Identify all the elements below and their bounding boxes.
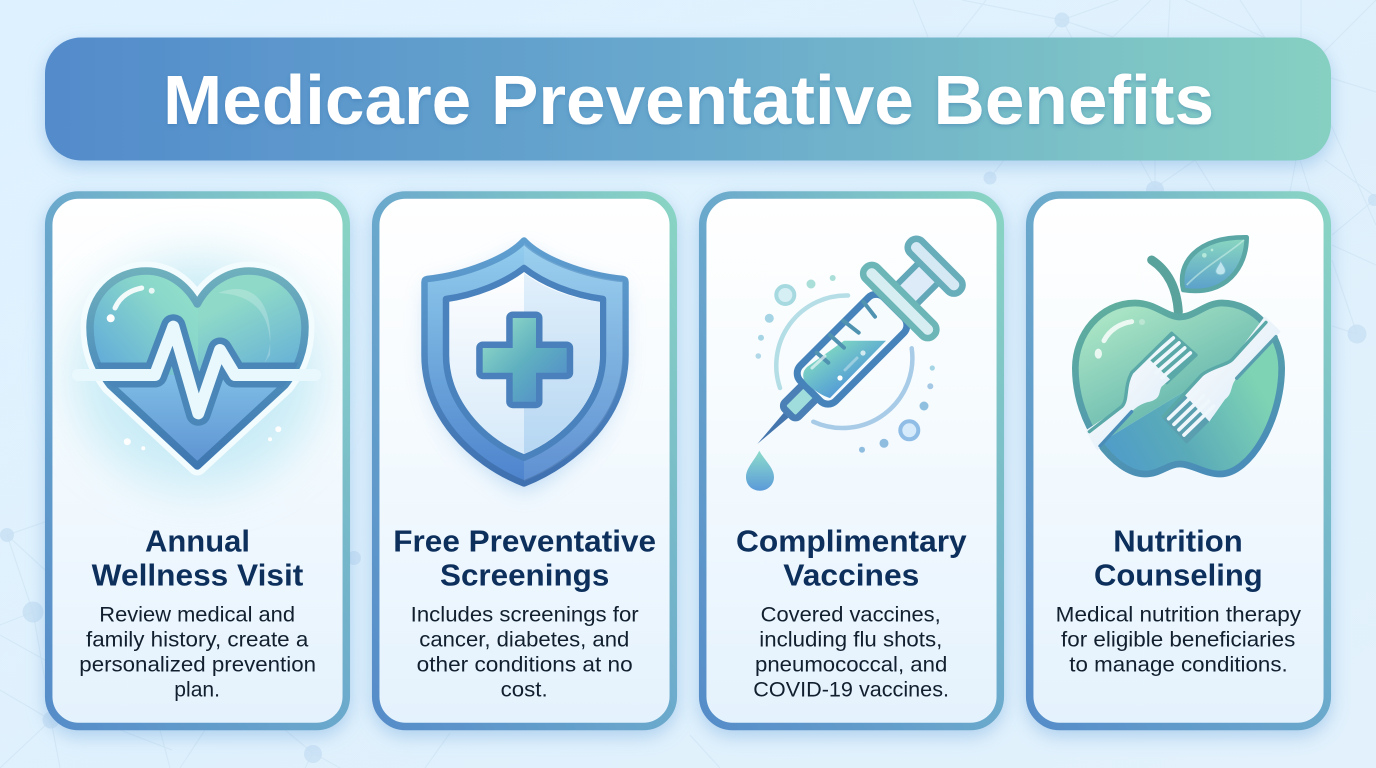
description: personalized prevention [79,654,316,677]
description: Includes screenings for [411,604,639,627]
description: Covered vaccines, [761,604,941,627]
heading: Annual [145,524,250,559]
heading: Free Preventative [393,524,656,559]
card frame [376,195,673,726]
description: other conditions at no [417,654,633,677]
icon: shield with cross [424,240,626,490]
panel: free preventative screenings [376,195,673,726]
description: pneumococcal, and [755,654,947,677]
description: cost. [501,679,548,702]
heading [736,524,967,592]
description [753,604,949,702]
description: Medical nutrition therapy [1056,604,1302,627]
panel: nutrition counseling [1030,195,1327,726]
description [79,604,316,702]
card frame [703,195,1000,726]
heading [393,524,656,592]
heading [92,524,303,592]
description: including flu shots, [759,629,942,652]
panel: annual wellness visit [49,195,346,726]
heading: Complimentary [736,524,967,559]
icon: apple with forks [1075,237,1282,474]
description: COVID-19 vaccines. [753,679,949,702]
card frame [1030,195,1327,726]
title: Medicare Preventative Benefits [163,61,1214,139]
left fork [1085,333,1196,451]
description: to manage conditions. [1069,654,1288,677]
description: cancer, diabetes, and [419,629,629,652]
heading [1094,524,1263,592]
icon: heart with pulse [60,257,340,487]
card frame [49,195,346,726]
right fork [1163,316,1281,442]
heading: Screenings [440,558,609,592]
title banner [45,38,1331,160]
description: family history, create a [86,629,309,652]
heading: Nutrition [1113,524,1243,559]
icon: drop [746,451,774,491]
heading: Vaccines [783,558,919,592]
description: plan. [174,679,220,702]
description [1056,604,1302,677]
heading: Counseling [1094,558,1263,592]
heading: Wellness Visit [92,558,303,592]
description: Review medical and [99,604,295,627]
icon: syringe [723,226,975,491]
panel: complimentary vaccines [703,195,1000,726]
description [411,604,639,702]
description: for eligible beneficiaries [1061,629,1295,652]
